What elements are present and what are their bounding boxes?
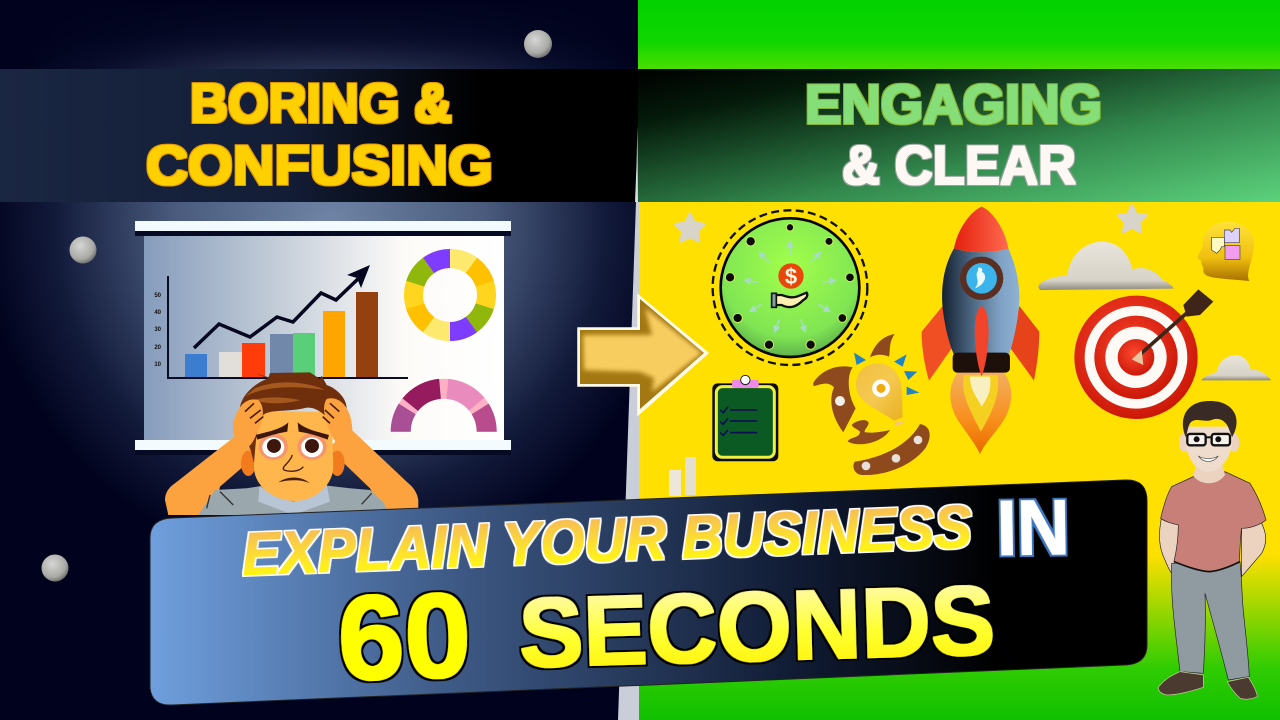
icon: money globe: $ <box>785 264 797 289</box>
icons: right group <box>1038 222 1271 699</box>
boy character <box>1158 401 1266 699</box>
icon: target with arrow <box>1074 289 1213 419</box>
heading band: right <box>638 69 1280 202</box>
icon: star right <box>1118 206 1146 232</box>
icon: marble top <box>524 30 552 58</box>
panel: projection screen <box>135 221 511 455</box>
bar chart: 10 <box>154 362 162 368</box>
icons: middle group <box>712 207 1039 475</box>
icon: cloud small <box>1202 355 1271 380</box>
banner text: explain your business: EXPLAIN YOUR BUSINESS <box>241 493 973 588</box>
icon: cloud large <box>1038 242 1173 290</box>
icon: marble middle <box>70 236 96 264</box>
icon: head with puzzle <box>1198 222 1254 281</box>
icon: star left <box>676 214 704 241</box>
bar chart: 30 <box>154 327 162 333</box>
heading: boring and confusing: BORING & <box>190 72 452 134</box>
bar chart: 40 <box>154 310 162 316</box>
arrow: gold pointing right <box>577 294 710 416</box>
divider highlight <box>635 125 638 202</box>
bar chart: 50 <box>154 293 162 299</box>
heading: engaging: ENGAGING <box>805 73 1102 135</box>
small background bars <box>669 457 696 496</box>
heading band: left <box>0 69 638 202</box>
bar chart: 20 <box>154 345 162 351</box>
icon: light bulb puzzle <box>813 334 930 475</box>
icon: marble bottom <box>42 554 68 582</box>
bar chart <box>154 265 408 378</box>
panel divider wedge <box>618 202 639 720</box>
banner text: seconds: SECONDS <box>518 565 996 688</box>
banner text: 60: 60 <box>336 568 473 706</box>
banner text: in: IN <box>996 483 1070 572</box>
heading: boring and confusing: CONFUSING <box>146 134 493 196</box>
panel: top green strip <box>638 0 1280 69</box>
heading: and clear: & CLEAR <box>842 134 1076 196</box>
gauge chart <box>401 389 487 432</box>
panel: right yellow and green background <box>638 202 1280 720</box>
panel: bottom banner <box>150 480 1147 705</box>
heading: boring and confusing <box>146 72 493 196</box>
worried man character <box>165 372 418 515</box>
donut chart <box>414 258 486 332</box>
icon: clipboard checklist <box>712 375 778 461</box>
icon: rocket <box>922 207 1039 454</box>
icon: money globe <box>713 210 867 365</box>
panel: left dark background <box>0 0 640 720</box>
top strip shade <box>0 0 640 69</box>
